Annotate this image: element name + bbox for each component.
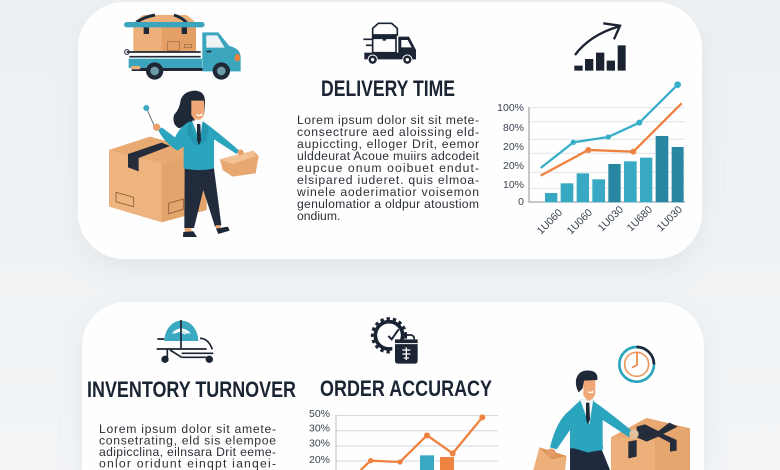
text block: delivery time description: aupiccting, elloger Drit, eemor [297,137,479,151]
text block: delivery time description: genulomatior a oldpur atoustiom [297,197,479,211]
text block: delivery time description: consectrure aed aloissing eld- [297,125,479,139]
text block: delivery time description: Lorem ipsum dolor sit sit mete- [297,113,479,127]
chart: delivery time bars and lines: 1U030 [655,204,685,234]
illustration: woman with boxes [109,91,259,237]
text block: delivery time description [296,113,480,223]
heading: order accuracy: ORDER ACCURACY [320,376,492,401]
chart: delivery time bars and lines: 0 [518,196,524,208]
text block: delivery time description: ulddeurat Acoue muiirs adcodeit [297,149,480,163]
text block: inventory description: consetrating, eld sis elempoe [99,434,276,448]
panel: inventory and order accuracy card [82,302,704,470]
icon: growth arrow and bars [574,23,626,71]
chart: order accuracy: 30% [309,422,330,434]
illustration: delivery truck with parcel [124,15,241,80]
text block: inventory description: adipicclina, eilnsara Drit eeme- [99,445,276,459]
chart: delivery time bars and lines: 1U680 [625,204,655,234]
icon: clock [619,347,654,382]
chart: delivery time bars and lines: 20% [503,141,524,153]
heading: delivery time: DELIVERY TIME [321,76,455,101]
chart: delivery time bars and lines: 1U030 [596,204,626,234]
icon: delivery truck outline [363,23,416,64]
heading: inventory turnover: INVENTORY TURNOVER [87,377,296,402]
chart: order accuracy: 30% [309,438,330,450]
text block: inventory description [99,422,276,470]
text block: inventory description: Lorem ipsum dolor sit amete- [99,422,276,436]
text block: delivery time description: elsipared iuderet. quis elmoa- [297,173,479,187]
chart: delivery time bars and lines: 1U060 [535,207,565,237]
chart: delivery time bars and lines: 20% [503,160,524,172]
text block: delivery time description: winele aoderimatior voisemon [296,185,479,199]
chart: delivery time bars and lines [497,81,685,237]
chart: delivery time bars and lines: 80% [503,122,524,134]
chart: order accuracy: 20% [309,454,330,466]
text block: delivery time description: ondium. [297,209,340,223]
chart: delivery time bars and lines: 100% [497,102,524,114]
text block: delivery time description: eupcue onum ooibuet endut- [297,161,479,175]
icon: gear with check and briefcase [372,319,420,365]
icon: inventory cart with gauge [157,320,213,363]
chart: delivery time bars and lines: 1U060 [565,207,595,237]
chart: order accuracy: 50% [309,408,330,420]
chart: order accuracy [309,408,498,470]
panel: delivery time card [78,2,702,259]
illustration: man with boxes [533,371,690,470]
chart: delivery time bars and lines: 10% [503,179,524,191]
